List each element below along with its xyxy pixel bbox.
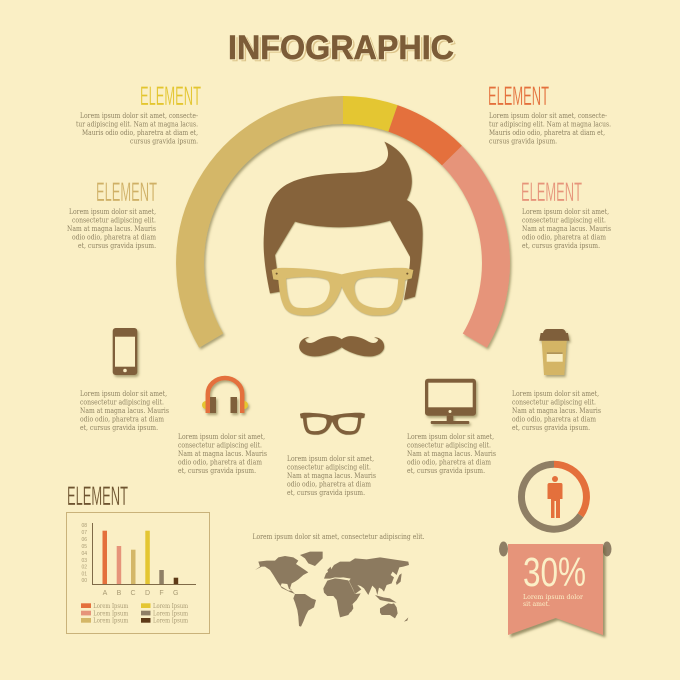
legend: Lorem Ipsum <box>153 603 188 610</box>
x axis labels: B <box>117 590 122 597</box>
map caption: Lorem ipsum dolor sit amet, consectetur adipiscing elit. <box>252 533 424 541</box>
element: orange top right: tur adipiscing elit. Nam at magna lacus. <box>489 120 611 128</box>
element: tan left: Nam at magna lacus. Mauris <box>67 225 156 233</box>
x axis labels: A <box>103 590 108 597</box>
element: yellow top left <box>76 81 201 146</box>
ribbon text <box>523 593 584 608</box>
text: phone: et, cursus gravida ipsum. <box>80 424 158 432</box>
text: coffee cup: Lorem ipsum dolor sit amet, <box>512 390 599 398</box>
y axis labels: 08 <box>81 523 87 529</box>
y axis labels <box>81 523 87 584</box>
element: salmon right: et, cursus gravida ipsum. <box>522 242 600 250</box>
moustache <box>299 336 384 356</box>
y axis labels: 03 <box>81 558 87 564</box>
element: salmon right: odio odio, pharetra at diam <box>522 234 606 242</box>
text: headphones: Lorem ipsum dolor sit amet, <box>178 433 265 441</box>
x axis labels: D <box>145 590 150 597</box>
title: INFOGRAPHIC <box>230 31 456 69</box>
element: orange top right: ELEMENT <box>488 81 549 111</box>
x axis labels <box>103 590 178 597</box>
text: phone: Nam at magna lacus. Mauris <box>80 407 169 415</box>
element: salmon right <box>521 177 611 250</box>
axes <box>92 523 196 584</box>
text: phone: consectetur adipiscing elit. <box>80 398 164 406</box>
text: headphones <box>178 433 267 475</box>
text: monitor: odio odio, pharetra at diam <box>407 458 491 466</box>
text: phone: odio odio, pharetra at diam <box>80 416 164 424</box>
text: monitor: consectetur adipiscing elit. <box>407 442 491 450</box>
text: monitor <box>407 433 496 475</box>
element: yellow top left: cursus gravida ipsum. <box>130 138 198 146</box>
text: glasses: odio odio, pharetra at diam <box>287 480 371 488</box>
element: salmon right: Nam at magna lacus. Mauris <box>522 225 611 233</box>
ribbon banner <box>499 542 612 635</box>
element: orange top right: Mauris odio odio, pharetra at diam et, <box>489 129 605 137</box>
element: salmon right: ELEMENT <box>521 177 582 207</box>
icon: phone <box>113 328 137 375</box>
element: yellow top left: Lorem ipsum dolor sit amet, consecte- <box>80 112 199 120</box>
text: phone: Lorem ipsum dolor sit amet, <box>80 390 167 398</box>
legend: Lorem Ipsum <box>93 610 129 617</box>
world map <box>255 552 409 627</box>
y axis labels: 07 <box>81 530 87 536</box>
ribbon rolls <box>499 542 612 556</box>
legend: Lorem Ipsum <box>93 618 129 625</box>
icon: person <box>548 476 562 518</box>
title: INFOGRAPHIC <box>229 30 455 68</box>
legend: Lorem Ipsum <box>93 603 129 610</box>
text: headphones: odio odio, pharetra at diam <box>178 458 262 466</box>
text: coffee cup <box>512 390 601 432</box>
text: headphones: Nam at magna lacus. Mauris <box>178 450 267 458</box>
text: glasses: Lorem ipsum dolor sit amet, <box>287 455 374 463</box>
element: salmon right: Lorem ipsum dolor sit amet, <box>522 208 609 216</box>
legend: Lorem Ipsum <box>153 610 188 617</box>
hair <box>264 142 423 300</box>
text: headphones: et, cursus gravida ipsum. <box>178 467 256 475</box>
x axis labels: F <box>159 590 164 597</box>
element: orange top right: Lorem ipsum dolor sit amet, consecte- <box>489 112 608 120</box>
text: ELEMENT <box>67 481 128 511</box>
x axis labels: G <box>173 590 178 597</box>
percentage: 30% <box>523 549 586 595</box>
element: orange top right: cursus gravida ipsum. <box>489 138 557 146</box>
icon: coffee cup <box>539 329 569 375</box>
text: monitor: Lorem ipsum dolor sit amet, <box>407 433 494 441</box>
y axis labels: 01 <box>81 572 87 578</box>
text: glasses: Nam at magna lacus. Mauris <box>287 472 376 480</box>
y axis labels: 00 <box>81 578 87 584</box>
bar chart panel <box>66 512 210 634</box>
legend <box>81 603 188 625</box>
text: coffee cup: consectetur adipiscing elit. <box>512 398 596 406</box>
y axis labels: 04 <box>81 551 87 557</box>
icon: monitor <box>425 379 476 424</box>
face glasses <box>272 268 413 315</box>
y axis labels: 05 <box>81 544 87 550</box>
text: ELEMENT <box>96 177 157 207</box>
text: coffee cup: et, cursus gravida ipsum. <box>512 424 590 432</box>
element: tan left <box>67 177 157 250</box>
donut chart with person <box>521 464 586 529</box>
y axis labels: 02 <box>81 564 87 570</box>
text: phone <box>80 390 169 432</box>
element: yellow top left: Mauris odio odio, pharetra at diam et, <box>82 129 198 137</box>
text: glasses <box>287 455 376 497</box>
text: monitor: et, cursus gravida ipsum. <box>407 467 485 475</box>
text: glasses: consectetur adipiscing elit. <box>287 464 371 472</box>
element: tan left: odio odio, pharetra at diam <box>72 234 156 242</box>
element: tan left: Lorem ipsum dolor sit amet, <box>69 208 156 216</box>
element: tan left: consectetur adipiscing elit. <box>72 216 156 224</box>
ribbon text: sit amet. <box>523 600 550 608</box>
legend: Lorem Ipsum <box>153 618 188 625</box>
icon: glasses <box>300 413 365 435</box>
text: ELEMENT <box>140 81 201 111</box>
bars <box>102 531 178 584</box>
x axis labels: C <box>130 590 136 597</box>
element: salmon right: consectetur adipiscing elit. <box>522 216 606 224</box>
semicircular segmented arc <box>190 110 496 341</box>
element: yellow top left: tur adipiscing elit. Nam at magna lacus. <box>76 120 198 128</box>
title: INFOGRAPHIC <box>228 29 454 67</box>
text: monitor: Nam at magna lacus. Mauris <box>407 450 496 458</box>
ribbon text: Lorem ipsum dolor <box>523 593 584 601</box>
text: coffee cup: Nam at magna lacus. Mauris <box>512 407 601 415</box>
text: headphones: consectetur adipiscing elit. <box>178 442 262 450</box>
element: orange top right <box>488 81 611 146</box>
element: tan left: et, cursus gravida ipsum. <box>78 242 156 250</box>
y axis labels: 06 <box>81 537 87 543</box>
text: coffee cup: odio odio, pharetra at diam <box>512 416 596 424</box>
text: glasses: et, cursus gravida ipsum. <box>287 489 365 497</box>
icon: headphones <box>202 378 248 413</box>
